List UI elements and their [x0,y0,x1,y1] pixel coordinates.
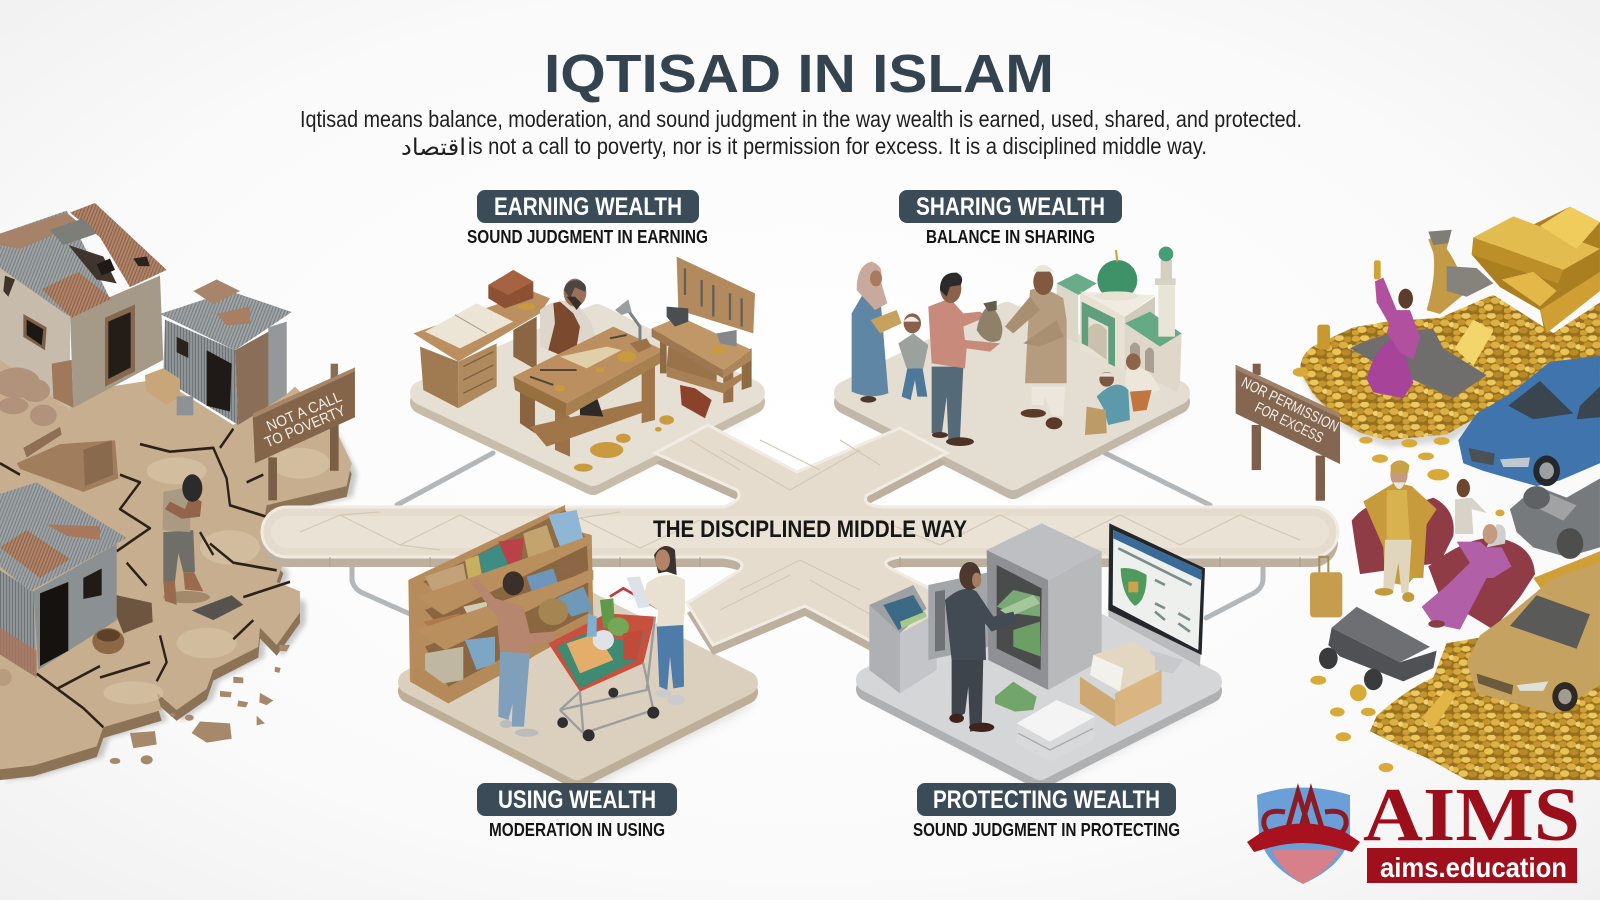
gold bars [1472,207,1600,333]
woman and child [852,262,928,403]
right scene: excess [1236,207,1600,780]
shopping cart [548,588,667,741]
platform: sharing wealth [846,314,1181,494]
suitcase [1310,557,1342,617]
businessman [945,562,1017,732]
AIMS logo: AIMS [1363,773,1580,857]
sharing wealth scene [852,247,1182,446]
child [1455,479,1487,534]
label: protecting wealth: SOUND JUDGMENT IN PROTECTING [913,820,1180,840]
label: earning wealth: SOUND JUDGMENT IN EARNING [467,227,708,247]
imam receiving [1005,265,1067,429]
label: using wealth [477,783,677,840]
broken furniture [17,427,118,492]
artisan at work [540,279,598,357]
shopper woman [627,546,685,705]
desk with book [413,270,550,408]
monitor [1108,523,1205,673]
left scene: poverty [0,203,358,780]
corrugated shed [0,482,127,678]
sign text: nor permission for excess: FOR EXCESS [1252,399,1326,447]
the disciplined middle way road [262,425,1338,656]
label: sharing wealth [899,190,1122,247]
person in distress [163,474,210,605]
money sack [1427,230,1493,314]
using wealth scene [408,505,685,741]
seated woman with goblet [1350,260,1487,398]
label: using wealth: MODERATION IN USING [489,820,665,840]
armchair with noble man [1352,460,1454,602]
subtitle text: is not a call to poverty, nor is it permission for excess. It is a disciplined middle way. [468,133,1207,159]
rubble bags [0,368,57,426]
gold car [1467,563,1600,714]
debris rocks [110,645,290,764]
main workbench [513,299,663,457]
sign text: not a call to poverty: TO POVERTY [262,402,348,451]
road label: THE DISCIPLINED MIDDLE WAY [653,516,967,543]
mosque [1057,247,1182,392]
leather case [680,385,712,418]
label: earning wealth: EARNING WEALTH [494,193,682,221]
gold coins on floor [574,415,674,472]
protecting wealth scene [869,523,1205,762]
platform: using wealth [410,598,753,786]
AIMS logo: aims.education [1380,852,1567,883]
crate and can [145,368,193,415]
coin pile upper [1293,295,1600,516]
cracked earth ground [0,352,358,780]
paper stack [1017,700,1095,762]
subtitle text [300,106,1302,161]
tool workbench [652,257,755,403]
label: protecting wealth: PROTECTING WEALTH [933,786,1160,814]
label: sharing wealth: BALANCE IN SHARING [926,227,1095,247]
man giving bag [928,273,1002,446]
label: sharing wealth: SHARING WEALTH [916,193,1105,221]
kiosk [869,585,937,693]
subtitle text: اقتصاد [401,135,466,161]
crate and basket [0,595,153,686]
sign text: nor permission for excess: NOR PERMISSION [1239,374,1341,436]
scrap sheet [192,595,243,620]
seated recipients [1085,353,1160,435]
blue car [1458,356,1600,486]
sign text: not a call to poverty: NOT A CALL [264,388,344,435]
sign: not a call to poverty [253,364,355,500]
label: protecting wealth [913,783,1180,840]
platform: earning wealth [422,316,753,484]
connector pipes [352,453,1263,618]
subtitle text: Iqtisad means balance, moderation, and sound judgment in the way wealth is earned, used, shared, and protected. [300,106,1302,132]
shopper man [470,571,553,737]
file box [1080,642,1162,727]
grey machinery [1510,479,1600,559]
AIMS logo [1247,773,1580,884]
label: earning wealth [467,190,708,247]
store shelf [408,505,593,703]
open safe [928,523,1102,690]
house: collapsed roof [0,203,167,410]
label: using wealth: USING WEALTH [498,786,656,814]
armchair with lady [1422,524,1535,630]
grey vehicle [1319,607,1437,690]
cash stack [995,682,1037,712]
shield emblem [1247,788,1360,884]
title: IQTISAD IN ISLAM [544,44,1054,104]
earning wealth scene [413,257,755,472]
tin shed [160,280,292,425]
sign: nor permission for excess [1236,364,1340,501]
coin pile lower [1310,551,1600,780]
platform: protecting wealth [868,596,1214,784]
